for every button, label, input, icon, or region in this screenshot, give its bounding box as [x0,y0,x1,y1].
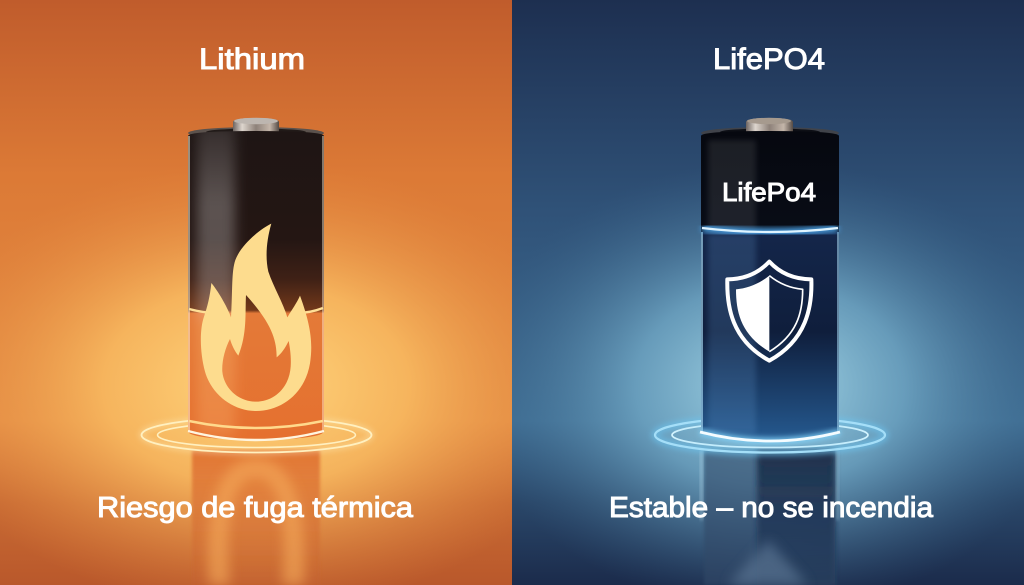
heading: Lithium: Lithium [199,43,305,76]
charge level line [189,308,323,313]
panel: Lithium [0,0,512,585]
battery: LifePO4 [700,118,840,441]
battery body [701,131,839,440]
glow rings: LifePO4 [655,418,885,452]
icon: flame [201,224,311,411]
base bands [189,421,323,428]
base glow line [700,432,840,441]
charge level line [702,228,838,232]
caption: Riesgo de fuga térmica: Riesgo de fuga térmica [97,492,414,524]
battery top and terminal [701,118,839,134]
body sheen [701,140,839,434]
battery body [188,131,324,440]
caption: Estable – no se incendia: Estable – no se incendia [609,492,934,524]
heading: LifePO4: LifePO4 [713,43,825,76]
glow rings: Lithium [142,418,372,452]
battery label: LifePo4: LifePo4 [722,177,816,207]
battery top and terminal [188,118,324,134]
body sheen [188,125,324,435]
reflection of LifePO4 battery [700,450,839,585]
battery: Lithium [188,118,324,440]
icon: shield [727,262,811,361]
reflection of Lithium battery [192,450,320,585]
panel: LifePO4 [512,0,1024,585]
